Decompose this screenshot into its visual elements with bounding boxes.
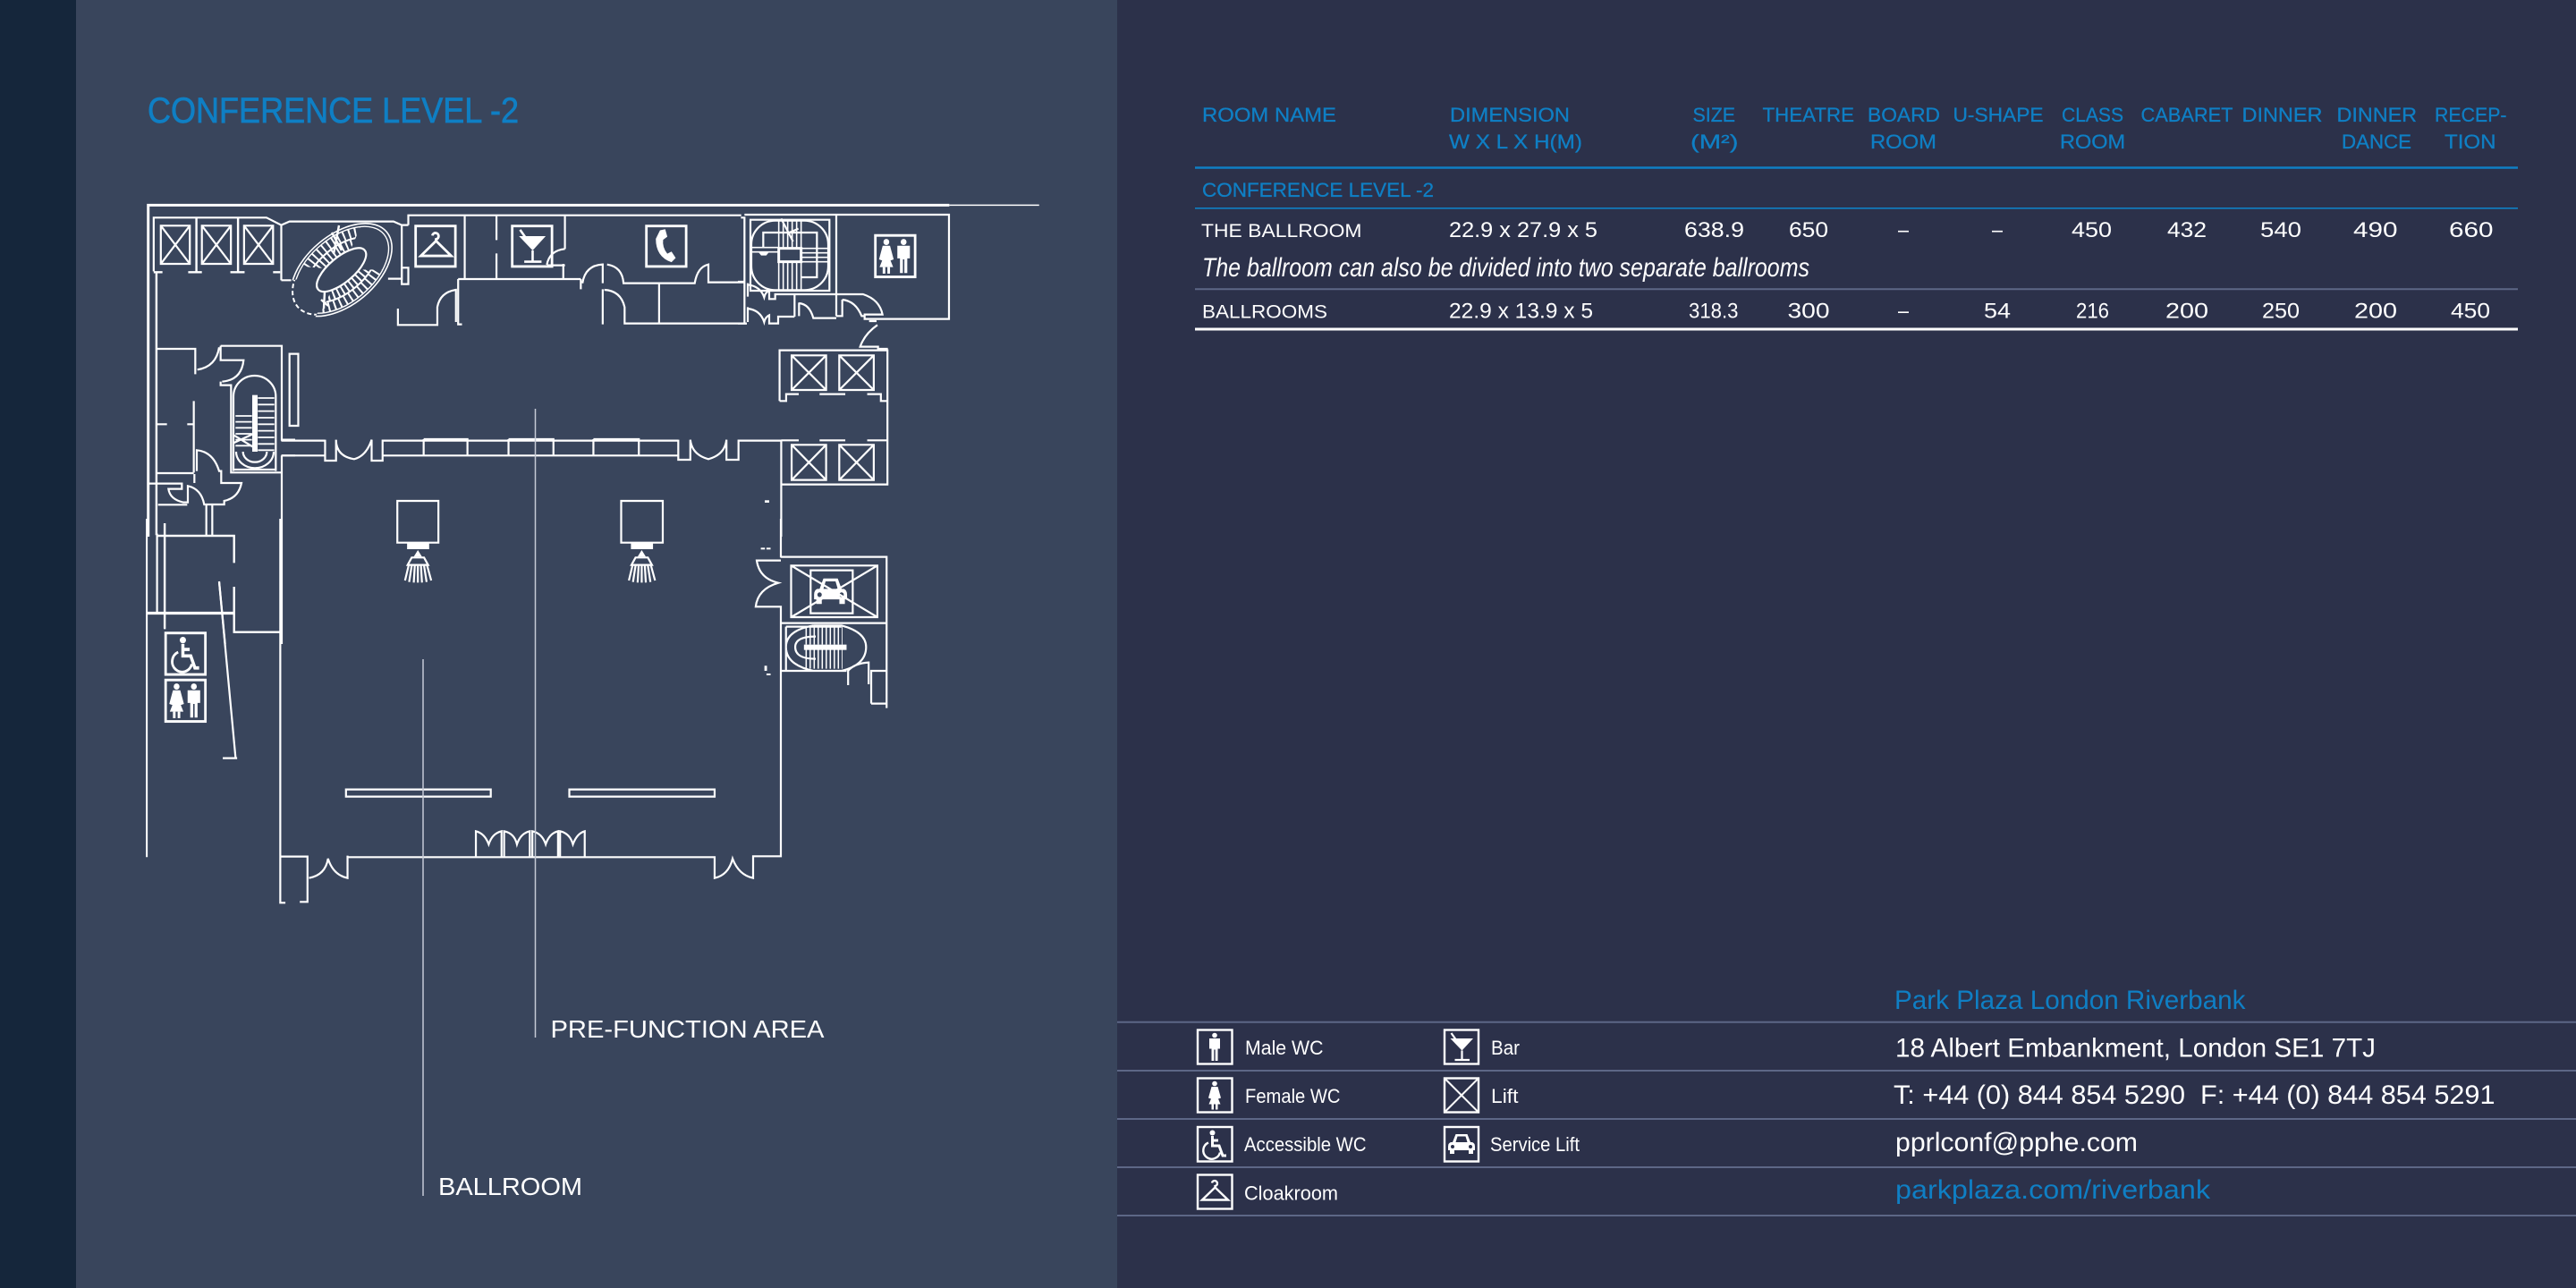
floor plan: upper section (148, 205, 1039, 537)
north east stair and rooms (738, 215, 949, 349)
label: pre-function area: PRE-FUNCTION AREA (551, 1015, 825, 1043)
outer balustrade (292, 223, 393, 317)
legend: accessible WC (1198, 1127, 1367, 1161)
table header: CLASS (2062, 104, 2123, 126)
table header: CABARET (2141, 104, 2233, 126)
legend: accessible WC: Accessible WC (1244, 1133, 1367, 1156)
icon: cloakroom on plan (416, 226, 455, 267)
table row: the ballroom: 660 (2449, 218, 2494, 242)
table section heading: CONFERENCE LEVEL -2 (1202, 179, 1434, 201)
upper treads (304, 227, 360, 268)
leader line: pre-function area (535, 409, 537, 1038)
icon: bar on plan (513, 226, 552, 267)
pre-function wall (281, 439, 781, 461)
label: ballroom: BALLROOM (438, 1173, 582, 1200)
west stair and corridor (148, 346, 295, 644)
table row: the ballroom: – (1992, 218, 2004, 242)
table row: the ballroom: THE BALLROOM (1201, 221, 1361, 242)
title: conference level -2: CONFERENCE LEVEL -2 (148, 91, 519, 131)
table header: (M²) (1690, 131, 1739, 153)
floor plan: ballroom section (147, 501, 886, 902)
table header: BOARD (1868, 104, 1940, 126)
table row: the ballroom: 540 (2260, 218, 2301, 242)
table row: the ballroom: 638.9 (1684, 218, 1744, 242)
table row: ballrooms: – (1898, 299, 1910, 324)
contact: address: 18 Albert Embankment, London SE1 7TJ (1895, 1034, 2376, 1063)
stair break marks (321, 225, 342, 309)
spiral staircase (292, 223, 393, 317)
legend: bar: Bar (1491, 1037, 1520, 1059)
table row: ballrooms: 200 (2354, 299, 2397, 324)
icon: toilets west on plan (165, 680, 206, 722)
table header: RECEP- (2435, 104, 2506, 126)
table row: the ballroom (1201, 218, 2494, 242)
legend: female WC (1198, 1079, 1341, 1113)
table row: ballrooms: 54 (1984, 299, 2011, 324)
table header: SIZE (1692, 104, 1735, 126)
leader line: ballroom (422, 659, 424, 1196)
legend: service lift: Service Lift (1490, 1133, 1580, 1156)
contact: website: parkplaza.com/riverbank (1895, 1175, 2211, 1205)
table header: W X L X H(M) (1449, 131, 1582, 153)
table header: DANCE (2342, 131, 2411, 153)
legend: service lift (1445, 1127, 1580, 1161)
table header: U-SHAPE (1953, 104, 2043, 126)
contact: hotel name: Park Plaza London Riverbank (1894, 986, 2246, 1015)
panel: floor plan (76, 0, 1117, 1288)
table row: the ballroom: 22.9 x 27.9 x 5 (1449, 218, 1597, 242)
projection screens (397, 501, 663, 543)
table header: ROOM NAME (1202, 104, 1336, 126)
walls and doors: north rooms (398, 216, 747, 325)
table header: ROOM (1870, 131, 1936, 153)
projector right (629, 543, 655, 582)
legend: lift (1445, 1079, 1519, 1113)
partition panels (346, 790, 715, 797)
icon: service lift car on plan (814, 579, 847, 604)
table header: DINNER (2241, 104, 2322, 126)
table row: ballrooms: 250 (2262, 299, 2300, 324)
icon: telephone on plan (647, 226, 686, 267)
legend: lift: Lift (1491, 1085, 1519, 1107)
legend: male WC (1198, 1030, 1324, 1064)
legend: cloakroom (1198, 1175, 1338, 1209)
contact: telephone and fax: T: +44 (0) 844 854 5290 F: +44 (0) 844 854 5291 (1894, 1080, 2496, 1110)
table row: ballrooms (1202, 299, 2490, 324)
table row: ballrooms: BALLROOMS (1202, 302, 1327, 322)
legend: female WC: Female WC (1245, 1085, 1341, 1107)
table row: ballrooms: 318.3 (1689, 299, 1739, 324)
table header: ROOM (2060, 131, 2125, 153)
panel: capacity table and details (1117, 0, 2576, 1288)
table header: DINNER (2336, 104, 2417, 126)
table row: the ballroom: – (1898, 218, 1910, 242)
east service lift and stair (756, 519, 886, 708)
legend: male WC: Male WC (1245, 1037, 1324, 1059)
dark left strip (0, 0, 76, 1288)
projector left (405, 543, 431, 582)
south wall and doors (280, 608, 781, 902)
contact: email: pprlconf@pphe.com (1895, 1128, 2138, 1157)
table header (1202, 104, 2506, 153)
lower treads (322, 269, 383, 313)
legend and contact rules (1117, 1022, 2576, 1216)
table row: ballrooms: 300 (1787, 299, 1830, 324)
legend: bar (1445, 1030, 1520, 1064)
lifts: top left (161, 225, 273, 264)
table header: DIMENSION (1450, 104, 1570, 126)
lifts: east (780, 351, 887, 537)
table header: TION (2445, 131, 2496, 153)
table row: the ballroom: 432 (2167, 218, 2207, 242)
central void (310, 241, 373, 299)
right wall dot (765, 500, 769, 503)
table note: The ballroom can also be divided into two separate ballrooms (1202, 253, 1809, 283)
table row: the ballroom: 450 (2072, 218, 2112, 242)
dashed outer edge (292, 279, 317, 316)
table row: the ballroom: 490 (2353, 218, 2397, 242)
table row: ballrooms: 216 (2076, 299, 2109, 324)
icon: toilets on plan (876, 235, 915, 277)
table header: THEATRE (1762, 104, 1854, 126)
legend: cloakroom: Cloakroom (1244, 1182, 1338, 1204)
table row: ballrooms: 200 (2165, 299, 2208, 324)
table row: ballrooms: 22.9 x 13.9 x 5 (1449, 299, 1593, 324)
icon: accessible WC on plan (165, 633, 206, 674)
table row: the ballroom: 650 (1789, 218, 1828, 242)
table row: ballrooms: 450 (2451, 299, 2490, 324)
